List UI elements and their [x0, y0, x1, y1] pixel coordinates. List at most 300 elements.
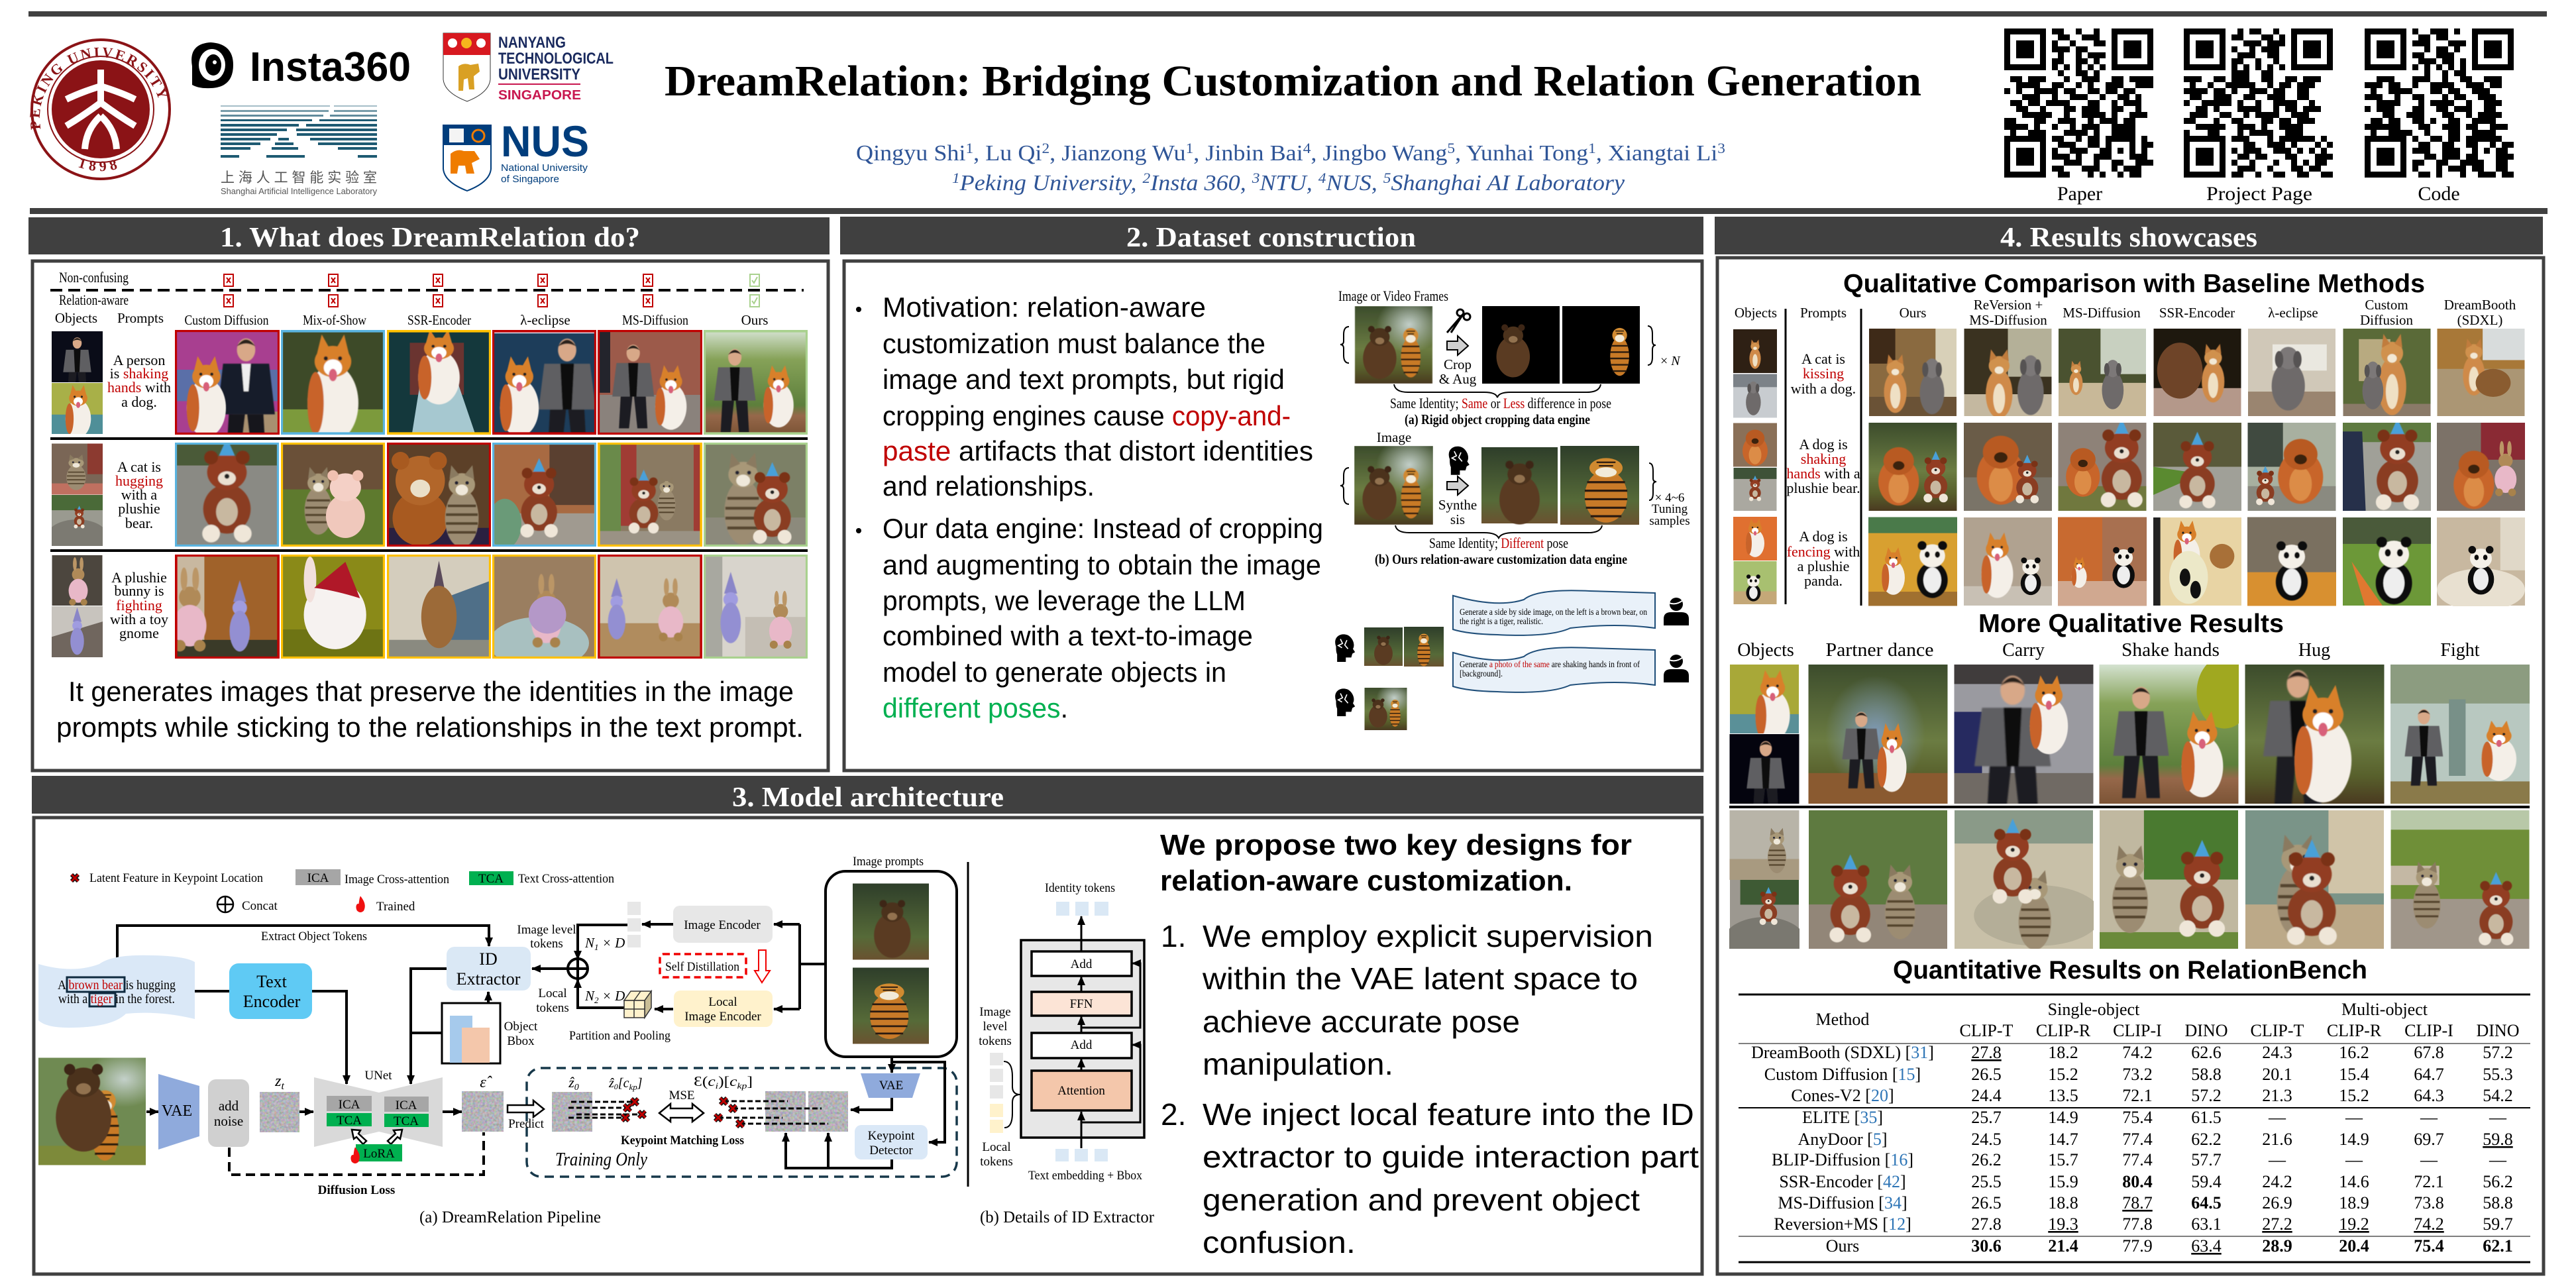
label: encoded keypoints: i: [716, 1081, 719, 1091]
arrow: synthesis: [1447, 476, 1468, 495]
table row: Cones-V2: 15.2: [2339, 1086, 2369, 1105]
object: cat: [1733, 329, 1777, 373]
icon: person 2: [1664, 655, 1689, 682]
logo: Nanyang Technological University: TECHNOLOGICAL: [498, 50, 614, 68]
key designs heading: relation-aware customization.: [1160, 865, 1572, 897]
label: N1 D: × D: [599, 935, 625, 951]
label: z0 hat keypoints: [c: [618, 1076, 629, 1091]
table row: Custom Diffusion: 58.8: [2191, 1065, 2222, 1084]
prompt bubble 1: Generate a side by side image, on the left is a brown bear, on: [1460, 608, 1647, 617]
table row: Ours: 62.1: [2483, 1236, 2513, 1256]
table row: DreamBooth: 74.2: [2122, 1043, 2153, 1062]
logo: National University of Singapore: National University: [501, 162, 588, 174]
label: z0 hat keypoints: kp: [629, 1082, 637, 1092]
VAE encoder: VAE: [162, 1102, 192, 1120]
prompt text row 1: a dog.: [121, 394, 157, 410]
table row: Reversion+MS: 27.8: [1971, 1214, 2002, 1234]
text prompt document: A brown bear is hugging: [58, 978, 176, 993]
table row: AnyDoor: AnyDoor [5]: [1798, 1130, 1888, 1149]
prompt row 1: A cat is: [1801, 350, 1845, 367]
QR label: Paper: Paper: [2057, 183, 2102, 205]
label: image level tokens: Image: [979, 1005, 1011, 1019]
label: text embedding: Text embedding + Bbox: [1028, 1169, 1142, 1183]
result: lambda-eclipse shaking hands: [492, 330, 596, 453]
column headers: λ-eclipse: [2268, 305, 2318, 321]
table row: DreamBooth: 27.8: [1971, 1043, 2002, 1062]
block: add bottom: [1032, 1033, 1132, 1058]
caption line (a): Same Identity; Same or Less difference in pose: [1390, 395, 1611, 411]
section header 3: 3. Model architecture: [732, 782, 1004, 813]
label: object bbox: Bbox: [507, 1034, 535, 1048]
table row: MS-Diffusion: [1778, 1193, 2513, 1212]
legend: ICA: Image Cross-attention: [345, 873, 449, 886]
table row: BLIP-Diffusion: 15.7: [2048, 1150, 2078, 1169]
column labels: Mix-of-Show: [303, 312, 367, 328]
label: image level tokens: tokens: [530, 937, 563, 951]
bullets text: paste artifacts that distort identities: [883, 435, 1313, 466]
result row 3: MS-diffusion: [2058, 517, 2147, 606]
object: dog: [52, 383, 103, 437]
column headers: Objects: [1735, 305, 1777, 321]
column headers: Ours: [1900, 305, 1926, 321]
label: encoded keypoints: ]: [747, 1073, 753, 1089]
logo: National University of Singapore: of Singapore: [501, 174, 559, 185]
prompt text row 2: plushie: [118, 500, 160, 517]
block: add top: [1032, 951, 1132, 976]
keypoint detector: Keypoint: [868, 1129, 915, 1143]
table row: BLIP-Diffusion: —: [2420, 1150, 2438, 1169]
section header 3: [32, 776, 1703, 814]
label: local tokens: [536, 987, 569, 1015]
result row 1: reversion: [1964, 329, 2051, 419]
label: local tokens: [980, 1140, 1013, 1169]
crop: tiger on black: [1562, 306, 1640, 384]
labels: non-confusing row: Non-confusing: [59, 269, 129, 286]
table row: Reversion+MS: [1774, 1214, 2513, 1234]
photo: bear hugging tiger: [38, 1051, 163, 1165]
summary text: [56, 676, 804, 743]
image encoder: [673, 906, 773, 943]
table row: ELITE: —: [2489, 1108, 2507, 1127]
table row: Custom Diffusion: 15.4: [2339, 1065, 2369, 1084]
authors: 4: [1303, 140, 1311, 156]
summary text: prompts while sticking to the relationships in the text prompt.: [56, 712, 804, 743]
prompt row 3: A dog is: [1799, 528, 1848, 545]
authors: 1: [1186, 140, 1193, 156]
prompt row 2: hands with a: [1786, 465, 1860, 482]
logo: Nanyang Technological University: [443, 33, 614, 103]
VAE encoder small: [861, 1073, 920, 1098]
QR label: Code: Code: [2418, 183, 2460, 205]
label: crop and aug: Crop: [1444, 356, 1472, 372]
table row: Ours: [1826, 1236, 2513, 1256]
prompt bubble 1: [1453, 590, 1655, 635]
result row 2: ours: [1868, 423, 1957, 511]
table row: Cones-V2: Cones-V2 [20]: [1791, 1086, 1894, 1105]
label: encoded keypoints: c: [729, 1073, 737, 1089]
results table: Multi-object: [2341, 1000, 2428, 1019]
table row: MS-Diffusion: 73.8: [2414, 1193, 2444, 1212]
column headers: more results: Carry: [2002, 640, 2045, 661]
results table: CLIP-T: [1960, 1021, 2013, 1040]
token squares left: [990, 1053, 1003, 1133]
logo: Peking University: [30, 38, 171, 180]
label: N2 D: N: [585, 988, 594, 1004]
results table: CLIP-I: [2113, 1021, 2162, 1040]
prompt text row 1: [107, 352, 171, 410]
legend: TCA: Text Cross-attention: [518, 872, 614, 886]
prompt text row 2: with a: [121, 486, 157, 503]
UNet shape: [314, 1077, 443, 1147]
caption line (b): Same Identity; Different pose: [1429, 535, 1568, 551]
block: add top: Add: [1071, 957, 1093, 971]
QR label: Project Page: Project Page: [2206, 183, 2312, 205]
panel: model architecture: [34, 818, 1702, 1274]
table row: Custom Diffusion: 64.7: [2414, 1065, 2444, 1084]
prompt row 2: A dog is: [1799, 436, 1848, 453]
authors: , Xiangtai Li: [1596, 141, 1717, 166]
column headers: MS-Diffusion: [1969, 312, 2047, 328]
section header 4: 4. Results showcases: [2000, 223, 2257, 253]
label: N2 D: × D: [599, 988, 625, 1004]
prompt text row 3: fighting: [116, 597, 162, 614]
label: z0 hat: 0: [574, 1083, 579, 1093]
table row: AnyDoor: 59.8: [2483, 1130, 2513, 1149]
local image encoder: Local: [708, 995, 737, 1009]
connectors: text encoder: [195, 991, 347, 1084]
result row 3: lambda-eclipse: [2247, 517, 2336, 606]
training only dashed region: [527, 1068, 957, 1177]
legend: trained: Trained: [376, 900, 415, 914]
label: extract object tokens: Extract Object Tokens: [261, 930, 367, 943]
authors: Qingyu Shi: [856, 141, 959, 166]
key designs heading: [1160, 829, 1632, 897]
result row 1: dreambooth: [2437, 329, 2524, 416]
caption title (a): (a) Rigid object cropping data engine: [1405, 411, 1590, 427]
column headers: Prompts: [1800, 305, 1847, 321]
table row: DreamBooth: 57.2: [2483, 1043, 2513, 1062]
result row 2: MS-diffusion: [2058, 419, 2147, 511]
affiliations: 4: [1318, 170, 1326, 186]
table row: DreamBooth: DreamBooth (SDXL) [31]: [1751, 1043, 1934, 1062]
label: z_t: z: [275, 1073, 281, 1090]
label: z0 hat: ẑ: [568, 1074, 574, 1091]
table row: Cones-V2: 64.3: [2414, 1086, 2444, 1105]
table row: ELITE: 75.4: [2122, 1108, 2153, 1127]
result: MS-diffusion hugging: [598, 443, 702, 547]
label: encoded keypoints: Ɛ(c: [694, 1073, 714, 1089]
table row: SSR-Encoder: 14.6: [2339, 1172, 2369, 1191]
concat node and connectors: [532, 925, 627, 1008]
block: attention: [1032, 1071, 1132, 1110]
table row: AnyDoor: 69.7: [2414, 1130, 2444, 1149]
logo: Nanyang Technological University: UNIVERSITY: [498, 66, 580, 83]
table row: Reversion+MS: Reversion+MS [12]: [1774, 1214, 1911, 1234]
results table: CLIP-T: [2251, 1021, 2304, 1040]
ID extractor: ID: [479, 949, 498, 969]
result: hug man and dog: [2245, 665, 2384, 809]
icon: LLM head 2: [1335, 688, 1355, 716]
label: tuning samples: samples: [1649, 514, 1690, 528]
QR code: Project Page: [2184, 28, 2333, 178]
key design 1: within the VAE latent space to: [1202, 961, 1638, 996]
column labels: λ-eclipse: [520, 312, 570, 328]
column labels: [55, 310, 768, 328]
self distillation: [660, 954, 746, 977]
connectors inside stack: [1081, 916, 1140, 1148]
table row: DreamBooth: 62.6: [2191, 1043, 2222, 1062]
transformer stack: [1021, 940, 1144, 1138]
prompt text row 3: bunny is: [114, 582, 164, 599]
table row: Cones-V2: 24.4: [1971, 1086, 2002, 1105]
key design 1: manipulation.: [1203, 1047, 1393, 1081]
table row: Custom Diffusion: 26.5: [1971, 1065, 2002, 1084]
object bbox: [442, 1003, 500, 1063]
table row: Cones-V2: 72.1: [2122, 1086, 2153, 1105]
table row: SSR-Encoder: [1779, 1172, 2513, 1191]
affiliations: Shanghai AI Laboratory: [1391, 171, 1625, 195]
table row: AnyDoor: 62.2: [2191, 1130, 2222, 1149]
prompt row 3: [1787, 528, 1860, 589]
result: partner dance cat and bear: [1809, 810, 1947, 949]
label: times N: × N: [1660, 354, 1681, 368]
result: shake hands man and dog: [2099, 656, 2253, 804]
table row: BLIP-Diffusion: 26.2: [1971, 1150, 2002, 1169]
table row: SSR-Encoder: 56.2: [2483, 1172, 2513, 1191]
icon: LLM head: [1449, 447, 1470, 475]
column labels: Objects: [55, 310, 97, 326]
check marks: [224, 274, 759, 307]
result row 3: SSR-encoder: [2153, 517, 2241, 606]
table row: BLIP-Diffusion: —: [2489, 1150, 2507, 1169]
table row: DreamBooth: 18.2: [2048, 1043, 2078, 1062]
label: synthesis: [1438, 497, 1477, 527]
decoded latent image: [552, 1092, 592, 1132]
authors: , Jinbin Bai: [1193, 141, 1303, 166]
table row: BLIP-Diffusion: 57.7: [2191, 1150, 2222, 1169]
key design 1: achieve accurate pose: [1203, 1004, 1520, 1039]
affiliations: Insta 360,: [1150, 171, 1252, 195]
label: image level tokens: [979, 1005, 1012, 1048]
brace: [1004, 1061, 1020, 1128]
table row: Custom Diffusion: 20.1: [2262, 1065, 2292, 1084]
prompt bubble 2: [1453, 647, 1655, 692]
partition cube: [624, 991, 651, 1018]
logo: Shanghai AI Laboratory: [221, 105, 377, 196]
affiliations: 3: [1252, 170, 1260, 186]
image prompts box: [826, 871, 957, 1057]
bullets text: combined with a text-to-image: [883, 620, 1253, 651]
connector: extract object tokens: [117, 926, 489, 963]
prompt text row 2: hugging: [115, 472, 163, 489]
result row 1: ours: [1869, 329, 1957, 416]
result: carry cat and bear: [1955, 810, 2102, 950]
result: custom diffusion fighting: [173, 555, 280, 659]
legend: TCA: [469, 871, 614, 886]
logo: National University of Singapore: [443, 117, 589, 191]
connectors: ID extractor to UNet: [411, 969, 488, 1084]
prompt text row 1: A person: [113, 352, 165, 368]
table row: Reversion+MS: 63.1: [2191, 1214, 2222, 1234]
legend: ICA: [295, 869, 449, 886]
result: custom diffusion hugging: [175, 438, 279, 547]
table row: MS-Diffusion: 78.7: [2122, 1193, 2153, 1212]
result: SSR-encoder fighting: [387, 555, 491, 659]
prompt row 2: shaking: [1801, 451, 1846, 467]
label: object bbox: Object: [504, 1020, 538, 1034]
heading: more qualitative results: More Qualitative Results: [1978, 610, 2284, 638]
logo: Nanyang Technological University: SINGAPORE: [498, 88, 581, 103]
divider: [1729, 806, 2530, 808]
affiliations: 2: [1143, 170, 1150, 186]
result: fight man and dog: [2390, 665, 2530, 804]
LoRA block: [350, 1144, 402, 1163]
text encoder: [229, 963, 312, 1019]
table row: ELITE: ELITE [35]: [1802, 1108, 1883, 1127]
column labels: Prompts: [117, 310, 164, 326]
result: mix-of-show fighting: [281, 555, 385, 659]
result: mix-of-show shaking hands: [281, 330, 385, 441]
legend: ICA: ICA: [307, 871, 329, 885]
label: tuning samples: Tuning: [1652, 502, 1688, 516]
logo: Insta360: [191, 42, 411, 90]
column headers: [1735, 297, 2516, 328]
object: man: [1729, 734, 1799, 818]
table row: SSR-Encoder: SSR-Encoder [42]: [1779, 1172, 1906, 1191]
section header 1: [28, 217, 830, 254]
table row: ELITE: —: [2268, 1108, 2286, 1127]
key design 2: 2.: [1161, 1097, 1186, 1132]
object: gray dog: [1733, 374, 1777, 417]
photo: source bear and tiger (a): [1355, 297, 1442, 384]
figure label: image: Image: [1377, 429, 1411, 445]
bullets text: image and text prompts, but rigid: [883, 364, 1285, 395]
authors: 3: [1717, 140, 1725, 156]
affiliations: 5: [1383, 170, 1391, 186]
bottom tokens: [1055, 1149, 1108, 1161]
bullets text: Motivation: relation-aware: [883, 292, 1206, 323]
table row: Custom Diffusion: 55.3: [2483, 1065, 2513, 1084]
prompt row 3: a plushie: [1798, 558, 1849, 574]
table row: Ours: 20.4: [2339, 1236, 2369, 1256]
summary text: It generates images that preserve the identities in the image: [68, 676, 794, 707]
table row: BLIP-Diffusion: [1772, 1150, 2507, 1169]
column headers: SSR-Encoder: [2159, 305, 2235, 321]
table row: Cones-V2: 54.2: [2483, 1086, 2513, 1105]
table row: Ours: 75.4: [2414, 1236, 2444, 1256]
block: add bottom: Add: [1071, 1038, 1093, 1052]
column headers: more results: Hug: [2298, 640, 2330, 661]
label: synthesis: sis: [1450, 511, 1465, 527]
result row 2: dreambooth: [2437, 423, 2525, 511]
object: cat: [52, 444, 103, 494]
affiliations: NUS,: [1325, 171, 1383, 195]
key design 2: confusion.: [1203, 1225, 1356, 1260]
result row 3: ours: [1868, 517, 1957, 606]
object: bunny: [52, 555, 102, 606]
ICA and TCA blocks: TCA: [394, 1114, 419, 1128]
bullets text: prompts, we leverage the LLM: [883, 585, 1246, 616]
block: attention: Attention: [1057, 1084, 1105, 1098]
result: custom diffusion shaking hands: [175, 330, 280, 453]
icon: person 1: [1664, 598, 1689, 625]
table row: SSR-Encoder: 59.4: [2191, 1172, 2222, 1191]
add noise: add: [219, 1098, 239, 1114]
table row: SSR-Encoder: 80.4: [2122, 1172, 2153, 1191]
bullets text: different poses.: [883, 692, 1068, 724]
prompt text row 2: A cat is: [117, 458, 161, 475]
column headers: more results: Partner dance: [1826, 640, 1933, 661]
table row: SSR-Encoder: 24.2: [2262, 1172, 2292, 1191]
result row 2: reversion: [1964, 423, 2052, 511]
keypoint dashes right: [715, 1098, 828, 1127]
add noise: [208, 1079, 249, 1147]
column labels: Ours: [741, 312, 768, 328]
result: hug cat and bear: [2245, 810, 2384, 949]
results table: [1739, 994, 2530, 1262]
table row: BLIP-Diffusion: BLIP-Diffusion [16]: [1772, 1150, 1913, 1169]
VAE encoder: [158, 1074, 199, 1150]
column headers: MS-Diffusion: [2063, 305, 2141, 321]
add noise: noise: [214, 1113, 243, 1129]
legend: TCA: TCA: [478, 872, 504, 886]
affiliations: Peking University,: [959, 171, 1143, 195]
generated bear: [1481, 447, 1558, 525]
label: object bbox: [504, 1020, 538, 1048]
key design 1: [1161, 919, 1653, 1081]
column headers: (SDXL): [2457, 312, 2502, 328]
prompt text row 3: A plushie: [111, 569, 167, 586]
column labels: SSR-Encoder: [407, 312, 471, 328]
authors: , Yunhai Tong: [1455, 141, 1588, 166]
ICA and TCA blocks: [327, 1096, 429, 1128]
bullets text: and augmenting to obtain the image: [883, 549, 1321, 580]
connectors: encoders to tokens: [642, 924, 673, 1009]
result: shake hands cat and bear: [2100, 810, 2238, 949]
logo: Peking University: PEKING UNIVERSITY: [30, 48, 167, 130]
header divider bar: [30, 208, 2548, 214]
text encoder: Text: [256, 972, 288, 991]
label: z0 hat keypoints: 0: [614, 1082, 618, 1091]
labels: relation-aware row: Relation-aware: [59, 292, 129, 308]
table row: Custom Diffusion: 73.2: [2122, 1065, 2153, 1084]
generated pair: tiger: [1404, 627, 1444, 667]
key design 2: extractor to guide interaction part: [1203, 1140, 1699, 1174]
prompt row 2: [1786, 436, 1860, 496]
authors: , Jingbo Wang: [1311, 141, 1447, 166]
bullets text: cropping engines cause copy-and-: [883, 400, 1291, 431]
logo: National University of Singapore: NUS: [501, 117, 589, 166]
noise latent z_t: [260, 1092, 299, 1132]
prompt row 1: with a dog.: [1791, 380, 1856, 397]
column headers: ReVersion +: [1974, 297, 2043, 313]
prompt photo: tiger: [853, 967, 929, 1044]
prompt text row 3: with a toy: [110, 611, 168, 627]
braces (b): [1340, 463, 1656, 538]
label: image level tokens: tokens: [979, 1034, 1012, 1048]
label: details caption: (b) Details of ID Extractor: [980, 1208, 1155, 1226]
result row 3: dreambooth: [2437, 517, 2525, 611]
arrow: self distillation: [755, 950, 770, 983]
result: mix-of-show hugging: [281, 443, 385, 547]
table row: Reversion+MS: 74.2: [2414, 1214, 2444, 1234]
label: partition and pooling: Partition and Pooling: [569, 1029, 671, 1043]
result: ours fighting: [704, 555, 808, 659]
table row: SSR-Encoder: 72.1: [2414, 1172, 2444, 1191]
object: plush bear: [1723, 880, 1805, 967]
label: local tokens: tokens: [980, 1155, 1013, 1169]
key designs heading: We propose two key designs for: [1160, 829, 1632, 861]
